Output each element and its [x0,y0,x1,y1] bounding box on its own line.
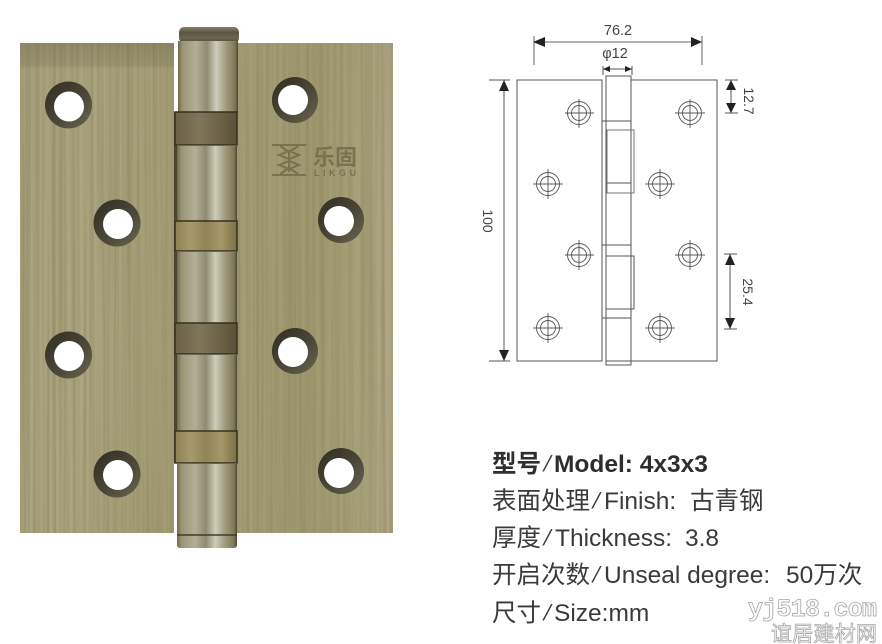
thickness: / [541,524,555,551]
size: / [541,599,555,626]
size: Size:mm [554,600,649,627]
drawing screw holes [533,99,705,343]
thickness [492,524,719,552]
hinge barrel [174,27,239,548]
dimension 25.4: 25.4 [740,278,756,306]
model: / [541,450,555,477]
unseal degree: 开启次数 [492,561,590,589]
watermark: yj518.com [748,595,877,624]
finish: Finish: [604,488,676,515]
dimension 12.7: 12.7 [741,87,757,115]
unseal degree [492,561,862,589]
dimension phi 12: φ12 [602,46,628,62]
thickness: Thickness: [555,525,672,552]
left hinge plate [20,43,174,533]
finish [492,487,764,515]
finish: 表面处理 [492,487,590,515]
dimension 100 [480,80,510,361]
right hinge plate [237,43,393,533]
unseal degree: / [590,561,604,588]
thickness: 3.8 [685,525,719,552]
dimension 12.7 [725,80,757,115]
model: Model: 4x3x3 [554,451,708,478]
engraved logo: LIKGU [314,168,356,178]
thickness: 厚度 [492,524,541,552]
engraved logo [272,145,357,178]
screw holes [45,77,364,498]
dimension 100: 100 [480,209,496,233]
technical drawing [480,23,757,365]
watermark [748,595,877,644]
finish: / [590,487,604,514]
dimension 25.4 [724,254,756,329]
specification text [492,450,862,627]
size [492,599,649,627]
hinge photo [20,27,393,548]
dimension 76.2 [533,23,702,65]
finish: 古青钢 [690,487,764,515]
unseal degree: Unseal degree: [604,562,770,589]
size: 尺寸 [492,599,541,627]
dimension 76.2: 76.2 [604,23,632,39]
model [492,450,708,478]
engraved logo: 乐固 [313,145,357,170]
dimension phi 12 [602,46,632,75]
hinge outline [517,76,717,365]
model: 型号 [492,450,541,478]
unseal degree: 50万次 [786,561,862,589]
